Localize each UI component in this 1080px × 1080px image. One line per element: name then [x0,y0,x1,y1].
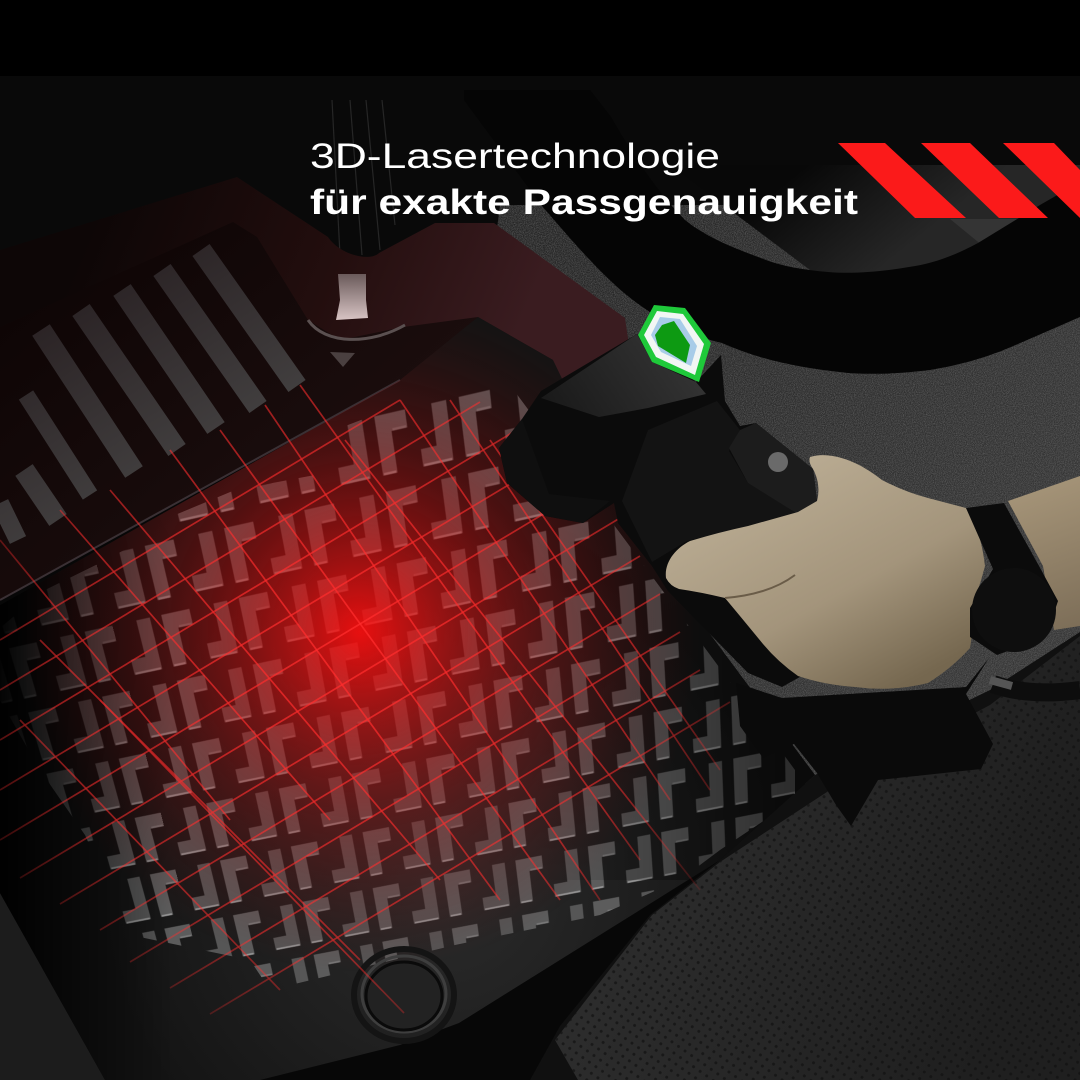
heel ring [354,949,454,1041]
mat upper lip [0,177,640,600]
mat floor ridge [0,380,400,600]
carpet patch above seat rail [670,165,1080,300]
curved heel lip [308,320,405,339]
seat rail arc [464,90,1080,374]
scanner top face [541,334,706,417]
floor mat [0,177,815,1080]
carpet [480,205,1080,790]
heading line 2: für exakte Passgenauigkeit [310,183,858,222]
forearm [1008,476,1080,630]
hand [666,455,1080,689]
top black band [0,0,1080,76]
small pad [330,352,355,367]
finger crease [725,575,795,598]
grip panel [622,401,798,562]
dim interior behind text [0,76,1080,296]
button pod [729,423,817,516]
red laser glow [50,342,667,943]
watch [966,503,1058,655]
left mat shadow [0,546,158,1066]
scanner base [736,658,993,826]
heading [310,137,858,222]
pedal reflection [336,274,368,320]
mat inner panel [0,222,553,600]
tread pattern [2,390,795,984]
mat ribs [0,250,297,540]
status screen [638,305,711,382]
cable [990,680,1080,692]
laser lines [0,385,730,1014]
pedal area streaks [332,100,395,255]
seat cushion [530,632,1080,1080]
heading line 1: 3D-Lasertechnologie [310,137,720,176]
right mat shadow [572,527,815,880]
scanner device [499,305,1080,826]
scanner lens [499,419,610,523]
mat lower body [0,317,815,1080]
door sill [0,893,105,1080]
light stripe on carpet [950,219,1048,246]
red stripes [838,143,1080,218]
scanner body [499,334,830,687]
